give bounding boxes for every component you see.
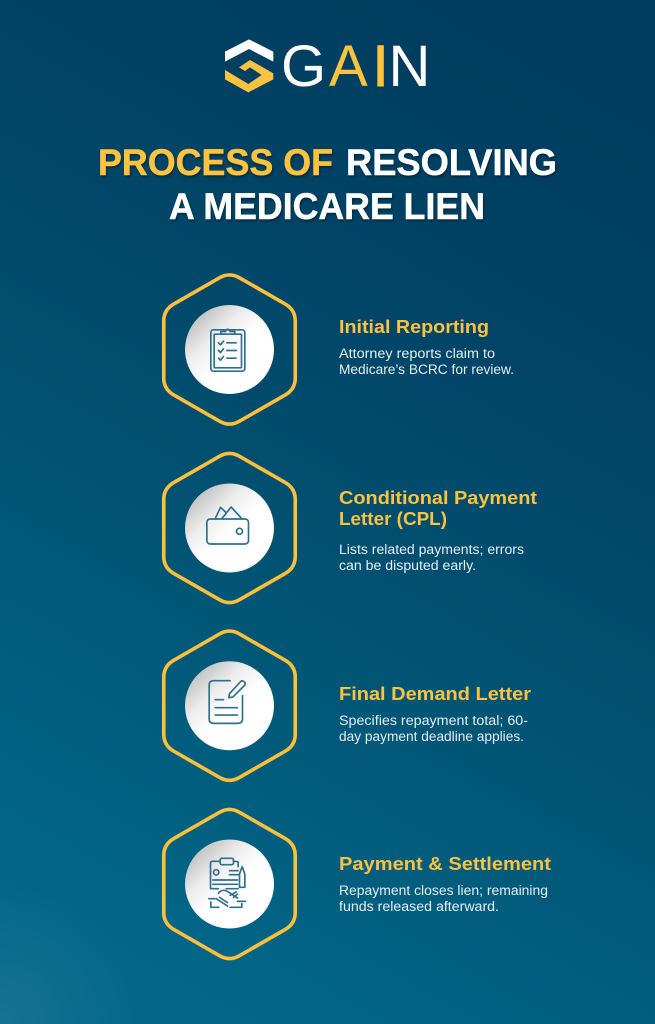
step 4 text: Repayment closes lien; remaining — [339, 883, 548, 898]
disc 3 — [185, 661, 274, 750]
hexagon frame 4 — [164, 809, 295, 959]
step 1: initial reporting — [164, 275, 514, 424]
step 2 text: Letter (CPL) — [339, 508, 447, 529]
title: PROCESS OF — [98, 142, 333, 183]
logo wordmark: G — [281, 34, 326, 99]
logo — [225, 34, 430, 99]
icon: clipboard checklist — [211, 329, 245, 371]
step 3 text: day payment deadline applies. — [339, 729, 524, 744]
disc 2 — [185, 484, 274, 572]
icon: wallet — [207, 507, 248, 544]
title — [98, 142, 557, 227]
step 4 text: funds released afterward. — [339, 899, 499, 914]
step 3 text: Specifies repayment total; 60- — [339, 713, 528, 728]
step 1 text: Medicare’s BCRC for review. — [339, 362, 514, 377]
step 2 text: can be disputed early. — [339, 558, 476, 573]
logo wordmark: A — [329, 34, 368, 99]
step 4: payment and settlement — [164, 809, 551, 959]
title: A MEDICARE LIEN — [169, 186, 485, 227]
disc 1 — [185, 305, 274, 394]
hexagon frame 1 — [164, 275, 295, 424]
title: RESOLVING — [346, 142, 557, 183]
step 2 text: Lists related payments; errors — [339, 542, 524, 557]
icon: document with pen — [209, 681, 245, 723]
step 1 text: Attorney reports claim to — [339, 346, 495, 361]
step 4 text — [339, 853, 551, 914]
logo wordmark: I — [372, 34, 389, 99]
icon: contract and handshake — [209, 858, 245, 907]
icon: gain hexagon mark — [225, 39, 273, 92]
step 3 text: Final Demand Letter — [339, 683, 531, 704]
hexagon frame 2 — [164, 453, 295, 603]
step 3 text — [339, 683, 531, 744]
step 1 text: Initial Reporting — [339, 316, 489, 337]
step 3: final demand letter — [164, 631, 531, 780]
step 4 text: Payment & Settlement — [339, 853, 551, 874]
hexagon frame 3 — [164, 631, 295, 780]
logo wordmark: N — [388, 34, 430, 99]
step 2 text: Conditional Payment — [339, 487, 537, 508]
step 1 text — [339, 316, 514, 377]
disc 4 — [185, 840, 274, 928]
step 2: conditional payment letter — [164, 453, 537, 603]
step 2 text — [339, 487, 537, 573]
